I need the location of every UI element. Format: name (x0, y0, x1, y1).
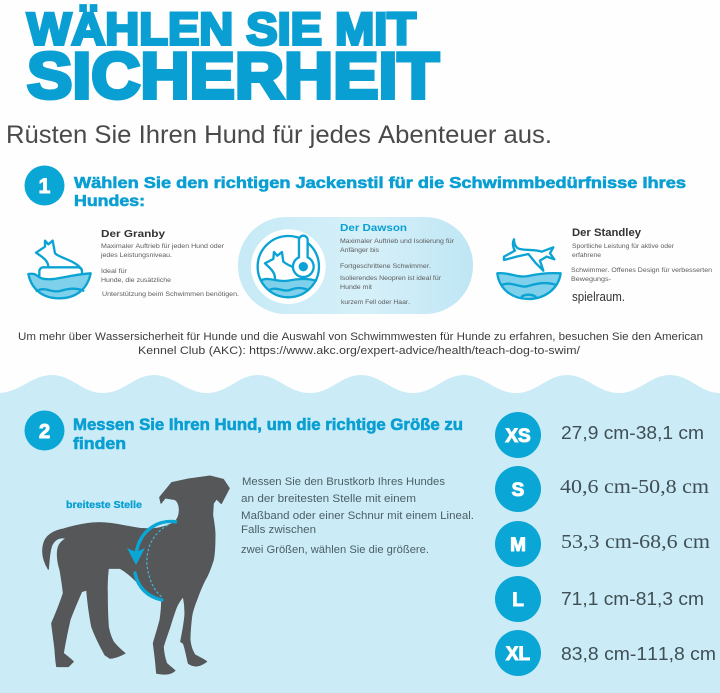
size row: M (495, 521, 710, 567)
panel: wavy water background (0, 375, 720, 693)
text: Der Dawson: Hunde mit (340, 284, 372, 291)
size row: XS: 27,9 cm-38,1 cm (561, 423, 704, 443)
size row: L: L (512, 590, 524, 611)
text: Der Granby: Ideal für (101, 268, 128, 275)
size row: S: S (512, 480, 524, 501)
size row: S: 40,6 cm-50,8 cm (560, 476, 709, 498)
text: Der Dawson (340, 222, 455, 306)
text: measuring instructions: Maßband oder einer Schnur mit einem Lineal. (241, 510, 474, 522)
size row: XL: XL (506, 644, 531, 665)
icon: Standley leaping dog (497, 239, 561, 299)
size row: XS: XS (505, 426, 531, 447)
text: Der Granby: Der Granby (101, 228, 165, 240)
label: breiteste Stelle: breiteste Stelle (66, 499, 142, 511)
text: Der Standley: erfahrene (572, 252, 601, 259)
step 2 heading (73, 416, 463, 453)
text: measuring instructions: an der breitesten Stelle mit einem (241, 493, 416, 505)
subtitle: Rüsten Sie Ihren Hund für jedes Abenteuer aus. (6, 121, 552, 149)
size row: XS (495, 412, 704, 458)
icon: Dawson dog and thermometer (251, 229, 326, 304)
dog silhouette with measuring arrow (43, 476, 229, 674)
title (27, 4, 439, 112)
step 1 heading (74, 175, 686, 210)
text: American Kennel Club note (18, 331, 703, 357)
text: Der Granby: Unterstützung beim Schwimmen benötigen. (102, 291, 239, 298)
text: measuring instructions (241, 476, 474, 556)
size row: M: M (510, 535, 526, 556)
text: Der Dawson: Anfänger bis (340, 247, 380, 254)
text: measuring instructions: Messen Sie den Brustkorb Ihres Hundes (242, 476, 446, 488)
text: measuring instructions: zwei Größen, wählen Sie die größere. (241, 544, 429, 556)
text: Der Dawson: Der Dawson (340, 222, 407, 234)
panel: Der Dawson (238, 217, 473, 314)
text: Der Granby: Hunde, die zusätzliche (101, 277, 171, 284)
text: Der Granby (100, 228, 239, 298)
text: Der Granby: jedes Leistungsniveau. (100, 252, 172, 259)
text: Der Dawson: Isolierendes Neopren ist ideal für (340, 275, 442, 282)
text: American Kennel Club note: Um mehr über Wassersicherheit für Hunde und die Auswahl von Schwimmwesten für Hunde zu erfahren, besuchen Sie den American (18, 331, 703, 343)
text: measuring instructions: Falls zwischen (241, 524, 316, 536)
title: SICHERHEIT (27, 39, 439, 112)
size row: XL: 83,8 cm-111,8 cm (561, 644, 716, 664)
step 2 badge (24, 410, 64, 450)
step 2 badge: 2 (39, 421, 50, 443)
text: Der Granby: Maximaler Auftrieb für jeden Hund oder (101, 243, 225, 250)
text: Der Standley: Schwimmer. Offenes Design für verbesserten (571, 267, 712, 274)
text: Der Dawson: Maximaler Auftrieb und Isolierung für (340, 238, 455, 245)
step 1 badge (24, 166, 64, 206)
text: Der Dawson: Fortgeschrittene Schwimmer. (340, 263, 431, 270)
text: Der Dawson: kurzem Fell oder Haar. (341, 299, 410, 306)
text: Der Standley: spielraum. (572, 290, 625, 304)
step 2 heading: finden (73, 435, 126, 453)
size row: XL (495, 630, 716, 676)
step 1 badge: 1 (39, 175, 51, 198)
text: Der Standley (571, 227, 712, 304)
step 1 heading: Wählen Sie den richtigen Jackenstil für die Schwimmbedürfnisse Ihres (74, 175, 686, 192)
title: WÄHLEN SIE MIT (27, 4, 416, 54)
step 1 heading: Hundes: (74, 193, 145, 210)
text: Der Standley: Sportliche Leistung für aktive oder (572, 243, 675, 250)
size row: M: 53,3 cm-68,6 cm (561, 531, 710, 553)
step 2 heading: Messen Sie Ihren Hund, um die richtige Größe zu (73, 416, 463, 434)
icon: Granby dog on raft (28, 241, 91, 298)
size row: L (495, 576, 704, 622)
text: American Kennel Club note: Kennel Club (AKC): https://www.akc.org/expert-advice/health/teach-dog-to-swim/ (138, 345, 581, 357)
size row: S (495, 466, 709, 512)
size row: L: 71,1 cm-81,3 cm (561, 589, 704, 609)
text: Der Standley: Der Standley (572, 227, 642, 239)
text: Der Standley: Bewegungs- (571, 276, 611, 283)
